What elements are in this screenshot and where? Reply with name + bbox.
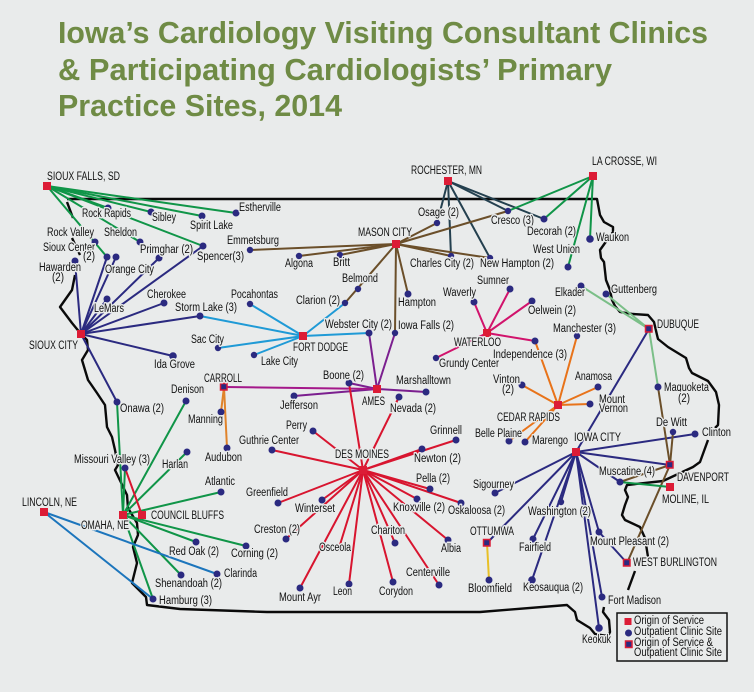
place name labels: Manning xyxy=(188,414,223,426)
place name labels: Knoxville (2) xyxy=(393,502,445,514)
place name labels: Sheldon xyxy=(104,227,137,239)
lines: Des Moines xyxy=(272,383,461,588)
place name labels: Harlan xyxy=(162,459,188,471)
place name labels: Sumner xyxy=(477,275,509,287)
place name labels: Hawarden xyxy=(39,262,81,274)
place name labels: Lake City xyxy=(261,356,298,368)
place name labels: Keosauqua (2) xyxy=(523,582,583,594)
place name labels: WEST BURLINGTON xyxy=(633,557,717,569)
place name labels: Corydon xyxy=(379,586,413,598)
legend: origin of service: Origin of Service xyxy=(634,615,704,627)
place name labels: Oelwein (2) xyxy=(528,305,576,317)
place name labels: MASON CITY xyxy=(358,227,412,239)
place name labels: Manchester (3) xyxy=(553,323,616,335)
place name labels: Chariton xyxy=(371,525,405,537)
place name labels: Elkader xyxy=(555,287,585,299)
place name labels: Onawa (2) xyxy=(120,403,164,415)
place name labels: Winterset xyxy=(295,503,336,515)
lines: La Crosse xyxy=(508,176,593,267)
place name labels: Spencer(3) xyxy=(197,251,244,263)
place name labels: Marshalltown xyxy=(396,375,451,387)
place name labels: Washington (2) xyxy=(528,506,591,518)
place name labels: Atlantic xyxy=(205,476,235,488)
place name labels: CEDAR RAPIDS xyxy=(497,412,560,424)
place name labels: OTTUMWA xyxy=(470,526,514,538)
place name labels: (2) xyxy=(83,251,95,263)
place name labels: Shenandoah (2) xyxy=(155,578,222,590)
place name labels: Pella (2) xyxy=(416,473,450,485)
place name labels: SIOUX CITY xyxy=(29,340,78,352)
place name labels: DAVENPORT xyxy=(677,472,729,484)
place name labels: Albia xyxy=(441,543,461,555)
place name labels: Iowa Falls (2) xyxy=(398,320,454,332)
place name labels: Audubon xyxy=(205,452,242,464)
place name labels: Marengo xyxy=(532,435,568,447)
place name labels: Algona xyxy=(285,258,313,270)
place name labels: AMES xyxy=(362,396,385,408)
place name labels: Muscatine (4) xyxy=(599,466,655,478)
place name labels: Independence (3) xyxy=(493,349,567,361)
place name labels: Red Oak (2) xyxy=(169,546,219,558)
title xyxy=(58,15,708,123)
legend: outpatient clinic site: Outpatient Clinic Site xyxy=(634,626,722,638)
place name labels: Decorah (2) xyxy=(527,226,576,238)
lines: Sioux Falls xyxy=(47,186,236,257)
place name labels: Centerville xyxy=(406,567,450,579)
place name labels: Bloomfield xyxy=(468,583,512,595)
place name labels: Grinnell xyxy=(430,425,462,437)
lines: Ames and Carroll xyxy=(221,333,426,448)
place name labels: Leon xyxy=(333,586,352,598)
place name labels: New Hampton (2) xyxy=(480,258,554,270)
legend: origin and clinic site: Outpatient Clinic Site xyxy=(634,647,722,659)
place name labels: Denison xyxy=(171,384,204,396)
place name labels: Charles City (2) xyxy=(410,258,474,270)
place name labels: Cherokee xyxy=(147,289,186,301)
place name labels: Vinton xyxy=(493,374,520,386)
place name labels: De Witt xyxy=(656,417,688,429)
place name labels: Waukon xyxy=(596,232,629,244)
place name labels: WATERLOO xyxy=(454,337,501,349)
place name labels: (2) xyxy=(502,384,514,396)
place name labels: Primghar (2) xyxy=(140,244,193,256)
place name labels: Osage (2) xyxy=(418,207,459,219)
place name labels: Corning (2) xyxy=(231,548,278,560)
place name labels: DUBUQUE xyxy=(657,319,699,331)
place name labels: Webster City (2) xyxy=(325,319,392,331)
place name labels: Pocahontas xyxy=(231,289,278,301)
place name labels: Clarion (2) xyxy=(296,295,340,307)
place name labels: LeMars xyxy=(94,303,124,315)
place name labels: Perry xyxy=(286,420,307,432)
place name labels: Missouri Valley (3) xyxy=(74,454,150,466)
place name labels: SIOUX FALLS, SD xyxy=(47,171,120,183)
origin of service squares xyxy=(40,172,674,519)
place name labels: Jefferson xyxy=(280,400,318,412)
place name labels: West Union xyxy=(533,244,580,256)
title: & Participating Cardiologists’ Primary xyxy=(58,52,613,87)
place name labels: Cresco (3) xyxy=(491,215,534,227)
place name labels xyxy=(22,156,731,646)
place name labels: Nevada (2) xyxy=(390,403,436,415)
place name labels: FORT DODGE xyxy=(293,342,348,354)
place name labels: Emmetsburg xyxy=(227,235,279,247)
place name labels: COUNCIL BLUFFS xyxy=(151,510,224,522)
place name labels: Waverly xyxy=(443,287,476,299)
place name labels: Britt xyxy=(333,257,351,269)
lines: Lincoln xyxy=(44,512,217,599)
lines: Cedar Rapids xyxy=(509,336,598,442)
place name labels: Hampton xyxy=(398,297,436,309)
place name labels: (2) xyxy=(52,272,64,284)
place name labels: Sac City xyxy=(191,334,224,346)
place name labels: Mount Pleasant (2) xyxy=(590,536,669,548)
place name labels: Storm Lake (3) xyxy=(175,302,237,314)
place name labels: Keokuk xyxy=(582,634,611,646)
place name labels: Orange City xyxy=(105,264,154,276)
place name labels: Sibley xyxy=(152,212,176,224)
lines: Waterloo xyxy=(436,289,535,358)
place name labels: Maquoketa xyxy=(664,382,709,394)
place name labels: Greenfield xyxy=(246,487,288,499)
place name labels: Boone (2) xyxy=(323,370,364,382)
legend: origin and clinic site: Origin of Service & xyxy=(634,637,713,649)
place name labels: CARROLL xyxy=(204,373,242,385)
legend xyxy=(617,613,727,661)
place name labels: LINCOLN, NE xyxy=(22,497,77,509)
place name labels: Oskaloosa (2) xyxy=(448,505,505,517)
lines: Fort Dodge xyxy=(200,303,369,355)
place name labels: Clarinda xyxy=(224,568,257,580)
lines: Sioux City xyxy=(75,246,203,402)
place name labels: Fairfield xyxy=(519,542,551,554)
place name labels: Guthrie Center xyxy=(239,435,299,447)
place name labels: DES MOINES xyxy=(335,449,389,461)
place name labels: ROCHESTER, MN xyxy=(411,165,482,177)
place name labels: Anamosa xyxy=(575,371,612,383)
place name labels: IOWA CITY xyxy=(574,432,621,444)
place name labels: MOLINE, IL xyxy=(662,494,709,506)
place name labels: Osceola xyxy=(319,542,351,554)
lines: Rochester xyxy=(437,181,544,258)
lines: Mason City xyxy=(250,211,508,333)
place name labels: Sigourney xyxy=(473,479,514,491)
place name labels: (2) xyxy=(678,393,690,405)
place name labels: Ida Grove xyxy=(154,359,195,371)
place name labels: Rock Valley xyxy=(47,227,94,239)
place name labels: Rock Rapids xyxy=(82,208,131,220)
combined origin and clinic squares xyxy=(220,326,673,566)
title: Practice Sites, 2014 xyxy=(58,88,343,123)
place name labels: Estherville xyxy=(239,202,281,214)
network lines xyxy=(44,176,695,628)
place name labels: LA CROSSE, WI xyxy=(592,156,657,168)
place name labels: Clinton xyxy=(702,427,731,439)
place name labels: Hamburg (3) xyxy=(159,595,212,607)
place name labels: Guttenberg xyxy=(611,284,657,296)
place name labels: Mount xyxy=(599,394,626,406)
title: Iowa’s Cardiology Visiting Consultant Clinics xyxy=(58,15,708,50)
place name labels: Fort Madison xyxy=(608,595,661,607)
lines: Omaha and Council Bluffs xyxy=(117,401,246,599)
lines: Dubuque, Davenport, Moline, Ottumwa xyxy=(487,286,673,580)
place name labels: Belle Plaine xyxy=(475,428,522,440)
place name labels: Spirit Lake xyxy=(190,220,233,232)
place name labels: Grundy Center xyxy=(439,358,499,370)
lines: Iowa City xyxy=(487,329,695,628)
place name labels: Newton (2) xyxy=(414,453,461,465)
legend: origin and clinic site xyxy=(626,637,722,659)
place name labels: Vernon xyxy=(599,403,628,415)
place name labels: Belmond xyxy=(342,273,378,285)
place name labels: OMAHA, NE xyxy=(81,520,129,532)
place name labels: Mount Ayr xyxy=(279,592,321,604)
map: Iowa state outline xyxy=(60,199,719,636)
clinic site dots xyxy=(72,204,698,632)
place name labels: Sioux Center xyxy=(43,242,95,254)
place name labels: Creston (2) xyxy=(254,524,300,536)
